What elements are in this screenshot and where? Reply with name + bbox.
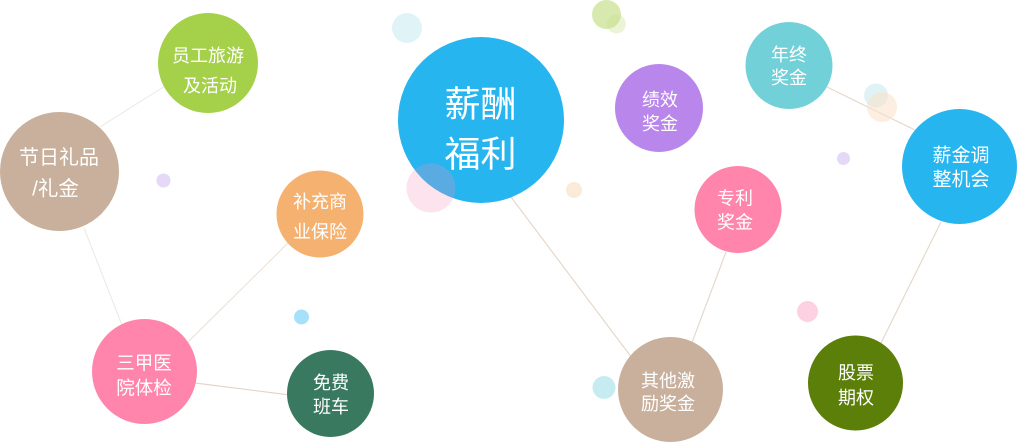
node: 三甲医院体检: 三甲医 [116, 352, 172, 374]
node: 专利奖金: 奖金 [717, 212, 753, 232]
decorative bubble: pink right [797, 301, 818, 322]
node: 绩效奖金: 奖金 [642, 114, 678, 134]
decorative bubble: green large [592, 0, 621, 29]
node: 薪酬福利: 薪酬 [444, 84, 517, 124]
node: 其他激励奖金: 其他激 [641, 371, 695, 391]
decorative bubble: lilac left [156, 174, 170, 188]
node: 补充商业保险 [276, 170, 364, 258]
node: 员工旅游及活动 [158, 13, 258, 113]
node: 补充商业保险: 补充商 [293, 192, 347, 212]
decorative bubble: peach [566, 182, 582, 198]
node: 股票期权 [808, 336, 903, 430]
node: 三甲医院体检 [92, 319, 197, 424]
node: 专利奖金: 专利 [717, 188, 753, 208]
decorative bubble: pale teal bottom [592, 376, 616, 399]
node: 员工旅游及活动: 员工旅游 [172, 46, 244, 66]
node: 绩效奖金: 绩效 [642, 90, 678, 110]
node: 其他激励奖金 [618, 337, 723, 442]
node: 年终奖金: 奖金 [771, 68, 807, 88]
node: 节日礼品/礼金 [0, 112, 119, 231]
node: 免费班车: 免费 [313, 373, 349, 393]
node: 节日礼品/礼金: 节日礼品 [19, 146, 99, 169]
node: 年终奖金: 年终 [771, 45, 807, 65]
node: 薪酬福利: 福利 [444, 134, 517, 174]
decorative bubble: pink overlapping center [406, 164, 456, 212]
decorative bubble: pale teal right [864, 84, 888, 108]
node: 年终奖金 [746, 22, 832, 109]
node: 免费班车: 班车 [313, 397, 349, 417]
node: 薪金调整机会 [902, 109, 1017, 224]
node: 节日礼品/礼金: /礼金 [32, 178, 79, 200]
decorative bubble: sky blue [294, 310, 309, 324]
node: 其他激励奖金: 励奖金 [641, 394, 695, 414]
node: 员工旅游及活动: 及活动 [183, 76, 237, 96]
node: 免费班车 [287, 350, 374, 437]
decorative bubble: lilac right [837, 152, 850, 165]
node: 股票期权: 股票 [838, 363, 874, 383]
node: 专利奖金 [694, 166, 782, 253]
node: 股票期权: 期权 [838, 388, 874, 408]
decorative bubble: pale cyan top [392, 13, 422, 43]
node: 薪酬福利 [398, 37, 564, 203]
node: 三甲医院体检: 院体检 [116, 378, 172, 398]
node: 绩效奖金 [615, 64, 703, 152]
decorative bubble: pale orange right [867, 92, 897, 122]
node: 补充商业保险: 业保险 [293, 222, 347, 242]
node: 薪金调整机会: 薪金调 [932, 144, 990, 166]
decorative bubble: green small [607, 14, 626, 34]
node: 薪金调整机会: 整机会 [932, 168, 990, 190]
